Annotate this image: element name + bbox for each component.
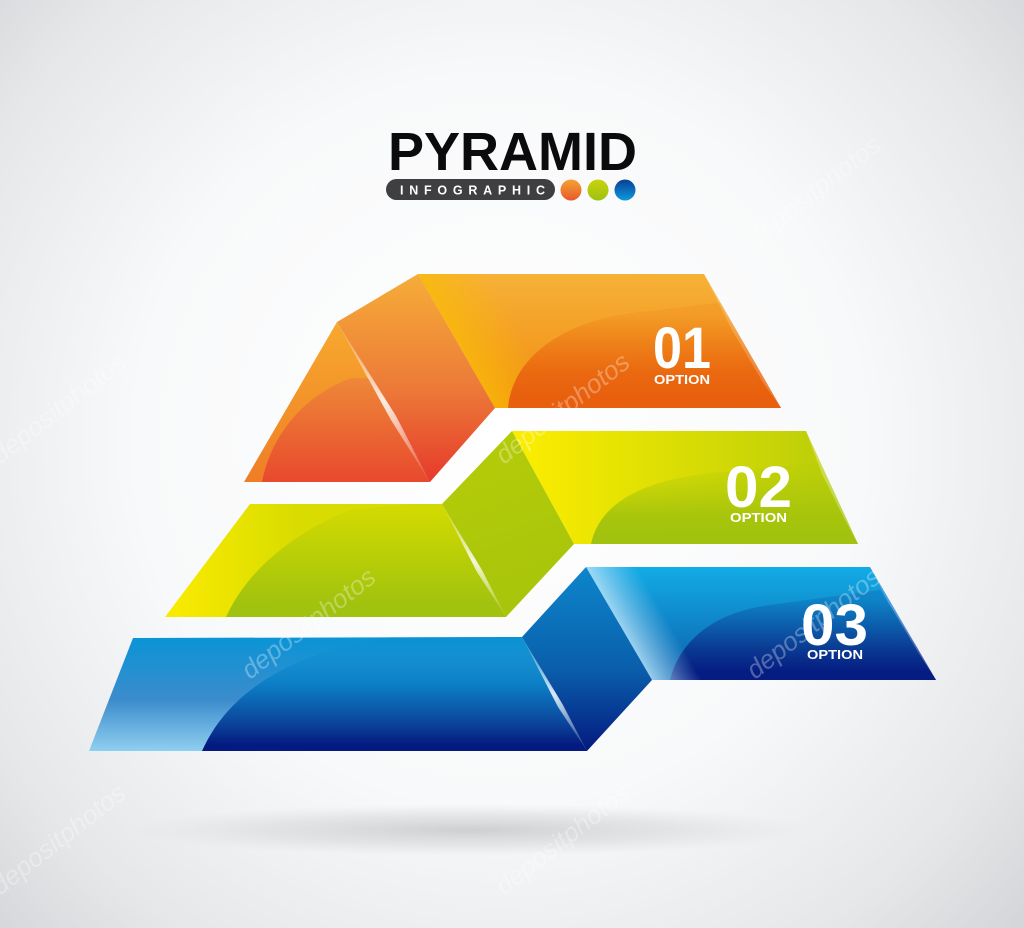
watermarks: depositphotos — [489, 777, 635, 901]
label 01: 01 — [653, 316, 711, 381]
label 02: 02 — [725, 455, 792, 520]
watermarks: depositphotos — [489, 346, 635, 470]
watermarks: depositphotos — [740, 561, 886, 685]
ground shadow — [130, 804, 810, 856]
watermarks — [0, 129, 886, 901]
tier 01: orange — [244, 274, 800, 490]
tier 02: green — [165, 431, 870, 625]
watermarks: depositphotos — [235, 129, 381, 253]
label 03: 03 — [801, 593, 868, 658]
label 01: OPTION — [654, 372, 710, 387]
colour dots — [560, 180, 636, 200]
label 02: OPTION — [730, 510, 787, 525]
tier 03: blue — [89, 567, 945, 760]
label 03: OPTION — [807, 647, 863, 662]
watermarks: depositphotos — [235, 561, 381, 685]
crease highlight — [522, 637, 587, 751]
crease highlight — [442, 504, 506, 617]
crease highlight — [337, 322, 430, 482]
subtitle pill: INFOGRAPHIC — [400, 184, 545, 198]
title: PYRAMID — [388, 122, 637, 182]
subtitle pill — [386, 179, 555, 200]
watermarks: depositphotos — [740, 129, 886, 253]
